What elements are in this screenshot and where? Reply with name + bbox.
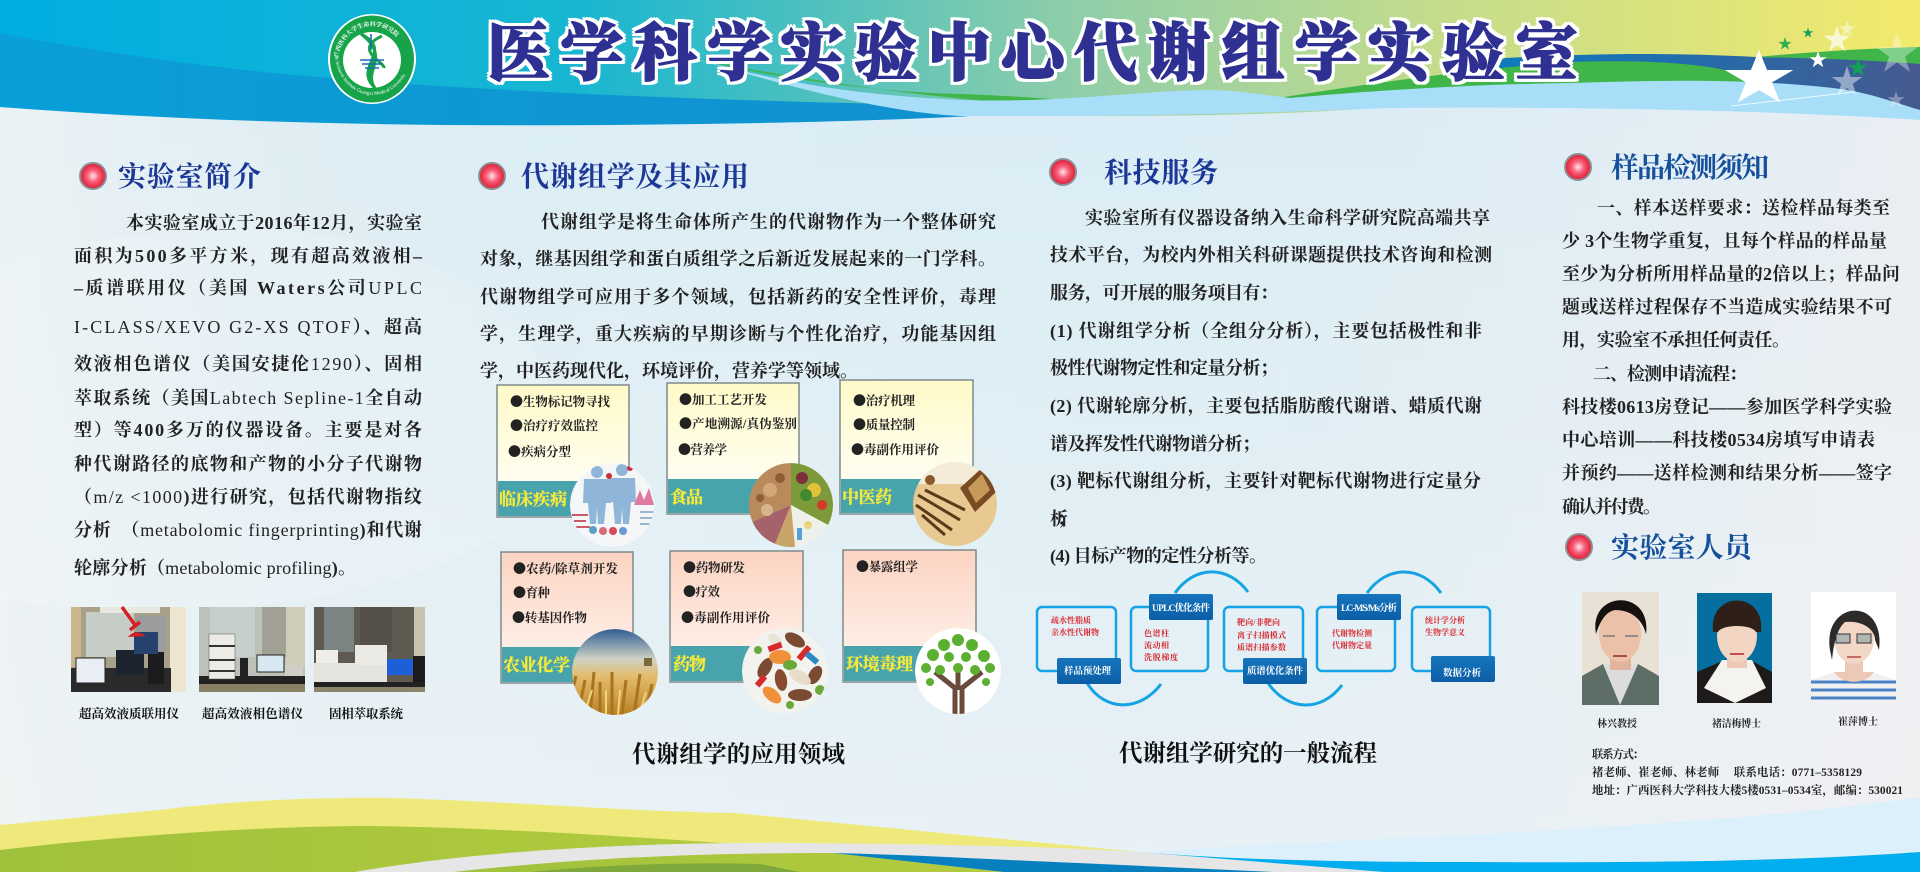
footer waves [0,797,1920,872]
step 2: UPLC优化条件 [1152,602,1210,614]
instrument captions: 超高效液质联用仪 [79,706,179,721]
step 4: 代谢物定量 [1332,640,1372,650]
card: food: 食品 [670,488,703,507]
heading: 代谢组学及其应用 [521,161,749,193]
notice text: 题或送样过程保存不当造成实验结果不可 [1562,296,1892,317]
card: traditional Chinese medicine: 中医药 [842,488,892,507]
logo [328,14,416,104]
card: agrochemistry: ●转基因作物 [512,607,587,626]
icon: green tree [915,628,1001,714]
instrument captions: 超高效液相色谱仪 [202,706,303,721]
card: pharmaceuticals [670,551,828,714]
intro text: –质谱联用仪（美国 Waters公司UPLC [73,277,422,298]
heading marker [1050,159,1076,185]
card: traditional Chinese medicine [840,380,998,546]
step 4: 代谢物检测 [1332,628,1372,638]
flow diagram [1037,572,1495,705]
contact information: 褚老师、崔老师、林老师 联系电话：0771–5358129 [1592,765,1862,779]
portrait: Chu Jiemei [1697,593,1772,703]
step 2: 色谱柱 [1144,628,1169,638]
icon: pills [742,628,828,714]
notice text: 并预约——送样检测和结果分析——签字 [1562,462,1892,483]
card: food [667,383,833,547]
step 5: 统计学分析 [1425,615,1465,625]
step 5 [1412,607,1495,682]
stars [1725,20,1918,107]
step 1: 疏水性脂质 [1051,615,1091,625]
portrait: Lin Xing [1582,592,1659,705]
step 5: 生物学意义 [1425,627,1465,637]
card: food: ●产地溯源/真伪鉴别 [679,413,797,432]
instrument captions [79,706,404,721]
description text: 对象，继基因组学和蛋白质组学之后新近发展起来的一门学科。 [480,248,996,270]
step 2: 洗脱梯度 [1144,652,1178,662]
card: clinical disease: ●疾病分型 [508,441,571,460]
services text: 极性代谢物定性和定量分析； [1050,357,1278,378]
intro text: I-CLASS/XEVO G2-XS QTOF）、超高 [74,316,422,337]
card: food: ●营养学 [678,439,727,458]
step 1: 样品预处理 [1064,665,1111,677]
card: traditional Chinese medicine: ●质量控制 [853,414,915,433]
step 4 [1317,594,1401,671]
caption: application areas: 代谢组学的应用领域 [632,741,846,768]
panel: laboratory staff [1566,532,1903,797]
step 3: 靶向/非靶向 [1237,617,1280,627]
notice text [1562,197,1900,517]
card: traditional Chinese medicine: ●毒副作用评价 [851,439,939,458]
card: clinical disease [497,385,654,547]
intro text: 型）等400多万的仪器设备。主要是对各 [74,419,422,440]
description text: 代谢组学是将生命体所产生的代谢物作为一个整体研究 [541,211,996,232]
services text: (4) 目标产物的定性分析等。 [1050,545,1267,567]
contact information [1592,747,1903,797]
heading marker [479,163,505,189]
heading marker [1566,534,1592,560]
staff names: 褚洁梅博士 [1712,717,1761,730]
card: agrochemistry: 农业化学 [502,656,570,675]
description text: 学，中医药现代化，环境评价，营养学等领域。 [480,360,858,382]
card: pharmaceuticals: 药物 [673,655,706,674]
notice text: 二、检测申请流程： [1593,363,1747,384]
notice text: 至少为分析所用样品量的2倍以上；样品问 [1562,263,1900,284]
card: pharmaceuticals: ●毒副作用评价 [681,607,770,626]
icon: wheat field [570,629,658,715]
card: environmental toxicology: ●暴露组学 [856,556,918,575]
icon: human body infographic [570,463,654,547]
staff names: 林兴教授 [1597,717,1637,730]
step 4: LC-MS/Ms分析 [1341,602,1397,614]
heading marker [80,163,106,189]
title: 医学科学实验中心代谢组学实验室 [487,19,1578,89]
card: pharmaceuticals: ●药物研发 [683,557,745,576]
step 2: 流动相 [1144,640,1169,650]
services text: (1) 代谢组学分析（全组分分析），主要包括极性和非 [1050,320,1482,342]
card: agrochemistry [501,552,658,715]
step 3: 质谱优化条件 [1247,665,1303,677]
services text: 谱及挥发性代谢物谱分析； [1050,433,1260,454]
card: food: ●加工工艺开发 [679,389,767,408]
step 3 [1224,607,1307,684]
icon: food wheel [748,463,833,547]
panel: laboratory introduction [71,161,425,721]
portrait: Cui Ping [1811,592,1896,701]
instrument captions: 固相萃取系统 [329,706,404,721]
services text: (2) 代谢轮廓分析，主要包括脂肪酸代谢谱、蜡质代谢 [1050,395,1482,417]
intro text: 轮廓分析（metabolomic profiling)。 [74,557,356,579]
arrows: connecting arcs [1087,572,1441,705]
step 1 [1037,607,1121,684]
services text: 服务，可开展的服务项目有： [1050,282,1278,304]
intro text: 种代谢路径的底物和产物的小分子代谢物 [74,453,422,474]
step 3: 质谱扫描参数 [1237,642,1286,652]
description text [480,211,996,382]
caption: general workflow: 代谢组学研究的一般流程 [1119,740,1378,767]
instrument photo 2 [199,607,305,692]
card: clinical disease: 临床疾病 [499,490,567,509]
notice text: 科技楼0613房登记——参加医学科学实验 [1562,396,1892,417]
step 3: 离子扫描模式 [1237,630,1286,640]
panel: sample testing notice [1562,152,1900,517]
description text: 代谢物组学可应用于多个领域，包括新药的安全性评价，毒理 [480,286,996,308]
logo: Life Sciences Institute Guangxi Medical University [334,52,406,96]
notice text: 一、样本送样要求：送检样品每类至 [1597,197,1890,218]
intro text [73,212,423,579]
heading: 实验室简介 [118,161,261,193]
card: agrochemistry: ●农药/除草剂开发 [513,558,618,577]
services text: 技术平台，为校内外相关科研课题提供技术咨询和检测 [1050,244,1492,266]
card: traditional Chinese medicine: ●治疗机理 [853,390,915,409]
panel: technical services [1037,157,1495,767]
panel: metabolomics and applications [479,161,1001,768]
intro text: 分析 （metabolomic fingerprinting)和代谢 [74,519,422,541]
notice text: 少 3个生物学重复，且每个样品的样品量 [1562,230,1887,252]
heading: 样品检测须知 [1611,152,1769,184]
heading: 实验室人员 [1611,532,1756,564]
contact information: 地址：广西医科大学科技大楼5楼0531–0534室，邮编：530021 [1592,783,1903,797]
staff names [1597,715,1878,730]
instrument photo 1 [71,607,186,692]
header band with swooshes [0,0,1920,125]
services text: 析； [1050,509,1075,529]
intro text: 本实验室成立于2016年12月，实验室 [126,212,422,234]
heading: 科技服务 [1104,157,1218,189]
step 2 [1131,594,1213,671]
card: clinical disease: ●治疗疗效监控 [510,415,598,434]
intro text: 萃取系统（美国Labtech Sepline-1全自动 [74,387,422,408]
intro text: 效液相色谱仪（美国安捷伦1290）、固相 [74,353,422,374]
services text: 实验室所有仪器设备纳入生命科学研究院高端共享 [1085,207,1490,228]
services text [1050,207,1492,567]
notice text: 用，实验室不承担任何责任。 [1562,329,1790,351]
step 1: 亲水性代谢物 [1051,627,1099,637]
heading marker [1565,154,1591,180]
card: environmental toxicology: 环境毒理 [846,654,913,674]
instrument photo 3 [314,607,425,692]
intro text: （m/z <1000)进行研究，包括代谢物指纹 [74,487,422,508]
card: pharmaceuticals: ●疗效 [683,581,720,600]
card: clinical disease: ●生物标记物寻找 [510,391,610,410]
intro text: 面积为500多平方米，现有超高效液相– [74,245,423,267]
contact information: 联系方式： [1592,747,1644,761]
staff names: 崔萍博士 [1838,715,1878,728]
logo: 广西医科大学生命科学研究院 [334,21,400,58]
card: agrochemistry: ●育种 [513,582,550,601]
step 5: 数据分析 [1443,667,1481,679]
card: environmental toxicology [843,550,1001,714]
notice text: 中心培训——科技楼0534房填写申请表 [1562,429,1875,450]
icon: herbs and abacus [913,462,998,546]
description text: 学，生理学，重大疾病的早期诊断与个性化治疗，功能基因组 [480,323,996,345]
services text: (3) 靶标代谢组分析，主要针对靶标代谢物进行定量分 [1050,470,1481,492]
notice text: 确认并付费。 [1562,497,1661,517]
